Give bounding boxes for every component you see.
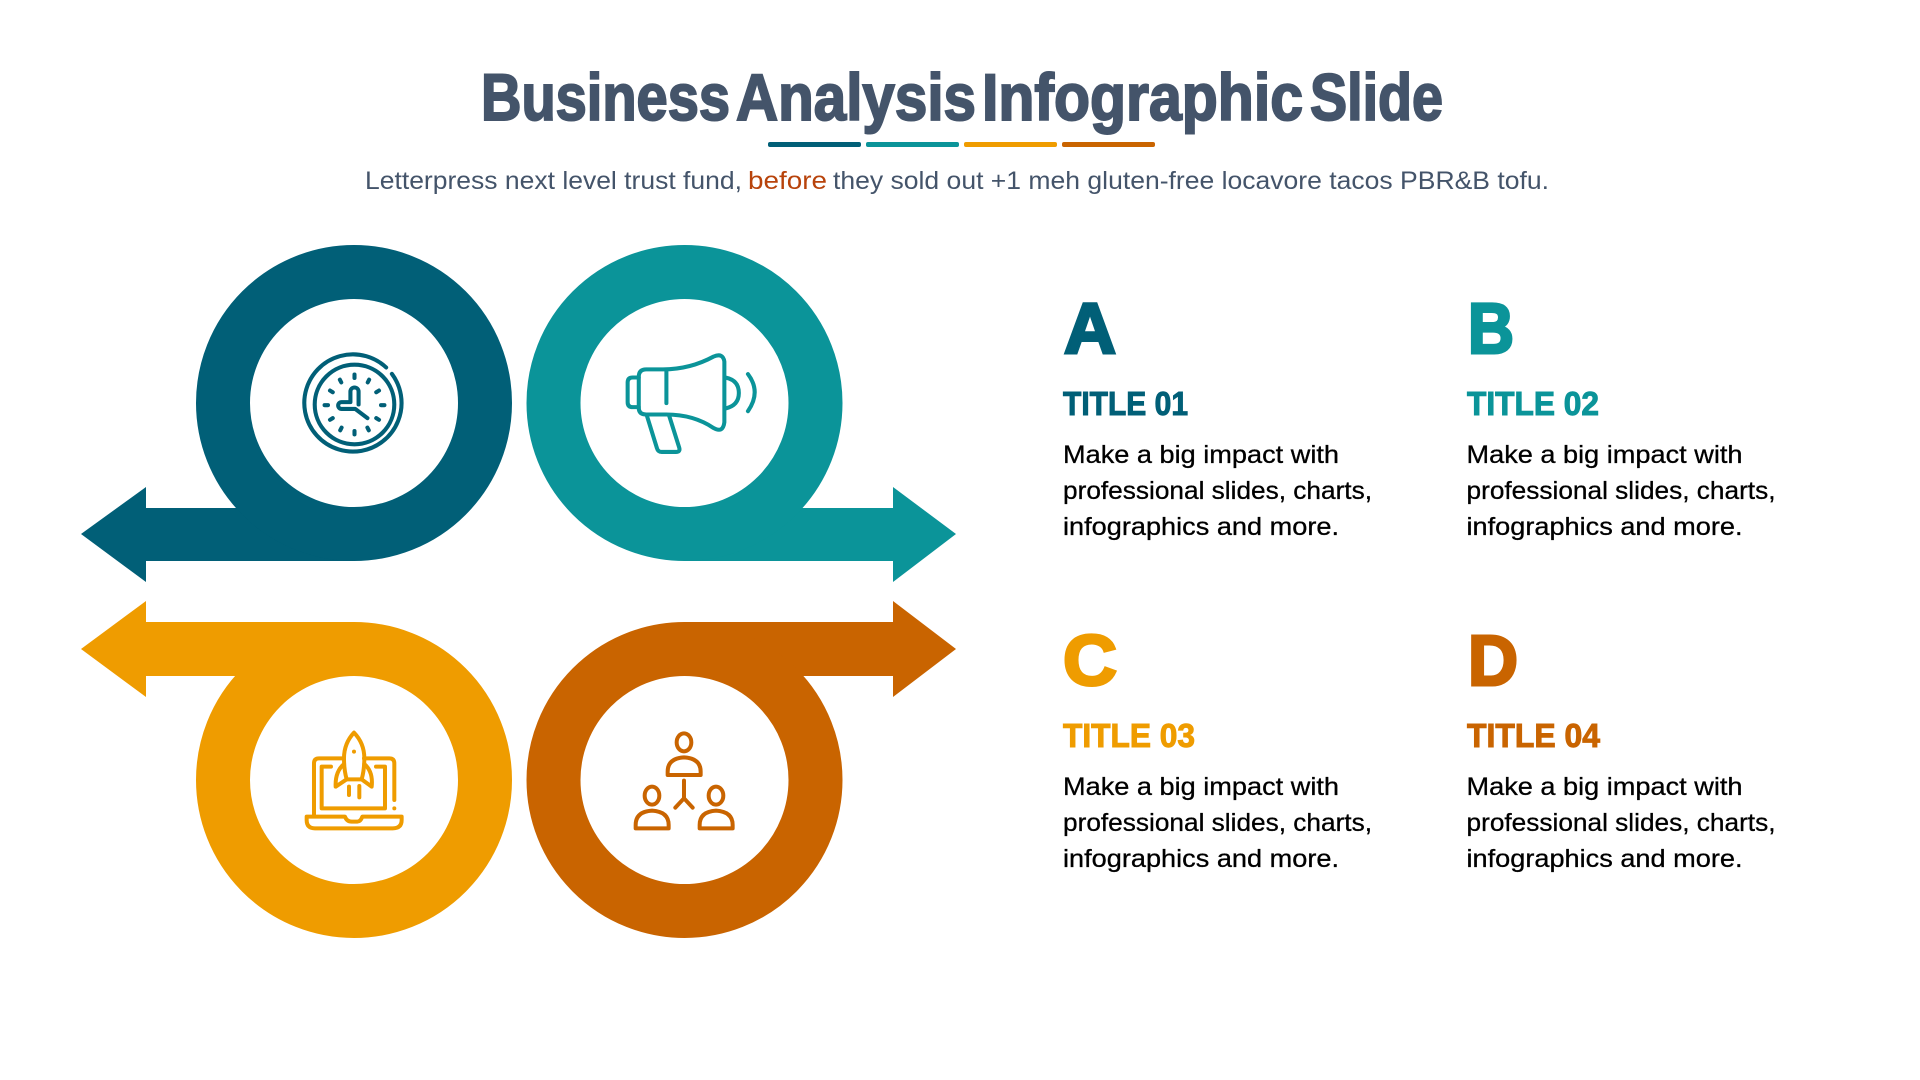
- body text: Make a big impact with: [1063, 773, 1339, 801]
- panel: item B: [1466, 290, 1776, 541]
- body text: Make a big impact with: [1466, 773, 1742, 801]
- subtitle: Letterpress next level trust fund,: [365, 167, 742, 195]
- title underline bars: [768, 142, 1155, 147]
- letter B: B: [1468, 290, 1514, 369]
- body text: [1063, 773, 1372, 873]
- title 01: TITLE 01: [1063, 385, 1188, 422]
- panel: item A: [1063, 290, 1372, 541]
- icon: rocket laptop: [307, 733, 402, 828]
- title: Slide: [1310, 60, 1443, 134]
- body text: Make a big impact with: [1466, 441, 1742, 469]
- subtitle: [365, 167, 1549, 195]
- subtitle: they sold out +1 meh gluten-free locavore tacos PBR&B tofu.: [833, 167, 1549, 195]
- title 02: TITLE 02: [1467, 385, 1599, 422]
- body text: infographics and more.: [1063, 845, 1339, 873]
- panel: item D: [1466, 622, 1776, 873]
- body text: professional slides, charts,: [1466, 477, 1776, 505]
- title: Infographic: [982, 60, 1303, 134]
- subtitle: before: [748, 167, 827, 195]
- letter A: A: [1064, 290, 1116, 369]
- body text: professional slides, charts,: [1063, 809, 1372, 837]
- body text: professional slides, charts,: [1466, 809, 1776, 837]
- body text: infographics and more.: [1466, 845, 1742, 873]
- panel: item C: [1063, 622, 1372, 873]
- title: Business: [481, 60, 730, 134]
- arrow loop: teal, megaphone: [554, 272, 956, 582]
- icon: megaphone: [628, 355, 755, 452]
- arrow loop: orange, team hierarchy: [554, 601, 956, 911]
- body text: Make a big impact with: [1063, 441, 1339, 469]
- header: [365, 60, 1549, 195]
- icon: team hierarchy: [636, 733, 733, 828]
- title 04: TITLE 04: [1467, 717, 1601, 754]
- body text: professional slides, charts,: [1063, 477, 1372, 505]
- letter D: D: [1468, 622, 1518, 701]
- title 03: TITLE 03: [1063, 717, 1195, 754]
- icon: clock: [304, 354, 402, 452]
- diagram: four looping arrows: [81, 272, 956, 911]
- body text: [1063, 441, 1372, 541]
- arrow loop: dark teal, clock: [81, 272, 485, 582]
- body text: [1466, 773, 1776, 873]
- body text: infographics and more.: [1063, 513, 1339, 541]
- body text: [1466, 441, 1776, 541]
- arrow loop: amber, rocket laptop: [81, 601, 485, 911]
- body text: infographics and more.: [1466, 513, 1742, 541]
- title: [481, 60, 1443, 134]
- letter C: C: [1063, 622, 1117, 701]
- title: Analysis: [736, 60, 976, 134]
